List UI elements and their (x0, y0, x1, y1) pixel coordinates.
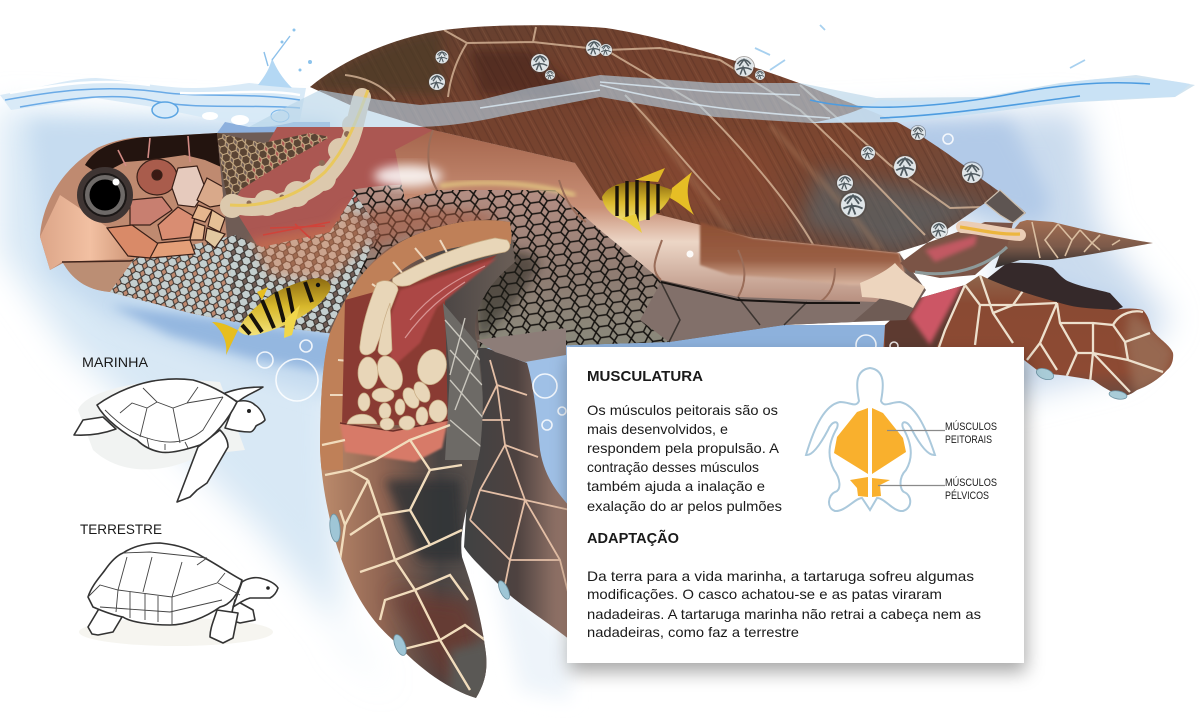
fish: upper (602, 168, 694, 233)
flipper network (322, 425, 485, 690)
lower head mesh (110, 235, 235, 322)
shadow blob (78, 380, 245, 469)
labels: MÚSCULOS (945, 476, 997, 489)
heading: adaptação: ADAPTAÇÃO (587, 529, 679, 547)
pelvic bone (860, 263, 925, 308)
lower jaw (62, 263, 110, 292)
bones (347, 238, 510, 430)
flipper behind (464, 348, 567, 638)
head scales (107, 159, 225, 258)
text: musculatura: também ajuda a inalação e (587, 478, 765, 494)
text: adaptação: Da terra para a vida marinha, a tartaruga sofreu algumas (587, 568, 974, 584)
neck bone and yellow vein (220, 90, 368, 218)
text: musculatura: mais desenvolvidos, e (587, 421, 728, 437)
water surface (0, 25, 1195, 127)
body base (190, 130, 926, 348)
bubbles (257, 134, 953, 430)
pelvic muscle and bead (900, 222, 1020, 278)
neck muscle (232, 127, 448, 250)
labels: MÚSCULOS (945, 420, 997, 433)
sketch: terrestre (79, 521, 278, 646)
sketch: marinha (74, 354, 265, 502)
text: adaptação (587, 568, 981, 640)
pelvic muscles (850, 477, 890, 497)
neck vessels (263, 222, 330, 238)
fish: lower (212, 278, 330, 355)
rear dark flipper (960, 263, 1123, 335)
tail (995, 220, 1153, 268)
neck tan mesh (217, 133, 330, 205)
labels (945, 420, 997, 502)
text: musculatura: exalação do ar pelos pulmões (587, 498, 782, 514)
text: musculatura: contração desses músculos (587, 459, 759, 475)
sketch: terrestre: TERRESTRE (80, 521, 162, 537)
eye (77, 167, 133, 223)
text: musculatura (587, 402, 782, 514)
labels: PEITORAIS (945, 434, 992, 446)
text: adaptação: nadadeiras, como faz a terrestre (587, 624, 799, 640)
dark muscle back (342, 255, 497, 425)
text: adaptação: nadadeiras. A tartaruga marinha não retrai a cabeça nem as (587, 606, 981, 622)
neck white mesh (110, 192, 400, 333)
flipper claws (329, 514, 512, 657)
muscle diagram (806, 368, 997, 511)
text: musculatura: Os músculos peitorais são os (587, 402, 778, 418)
barnacles (428, 39, 983, 239)
arc band (331, 231, 512, 470)
scute lines (345, 27, 983, 258)
shell carapace (310, 25, 1026, 252)
text: musculatura: respondem pela propulsão. A (587, 440, 780, 456)
ground shadow (79, 618, 273, 646)
rear flipper claws (1035, 366, 1128, 401)
pectoral muscles (834, 408, 906, 474)
grey band over flipper (477, 328, 566, 362)
front flipper (310, 215, 520, 705)
lower grey band (640, 282, 876, 342)
text: adaptação: modificações. O casco achatou-se e as patas viraram (587, 586, 942, 602)
pale marginal band (374, 130, 905, 302)
shell tail plate (985, 190, 1025, 223)
labels: PÉLVICOS (945, 489, 989, 502)
grey fan (443, 303, 483, 460)
body scales (345, 184, 669, 348)
info panel (567, 347, 1024, 663)
red cut below bones (340, 420, 448, 462)
beak (40, 195, 140, 270)
head (40, 133, 235, 322)
flipper network (938, 275, 1163, 392)
heading: musculatura: MUSCULATURA (587, 368, 703, 385)
rear main flipper (884, 275, 1174, 396)
sketch: marinha: MARINHA (82, 354, 149, 370)
